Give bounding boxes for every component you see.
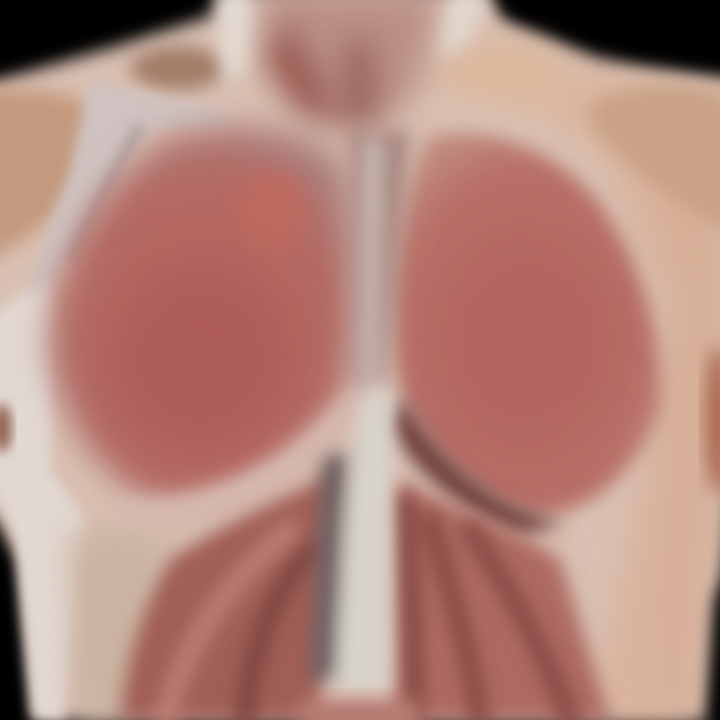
diaphragm membrane: left — [110, 375, 360, 526]
lung shading — [110, 250, 615, 450]
clavicle hollow: left — [130, 46, 226, 90]
shoulder: left — [0, 89, 112, 265]
lower left flank — [70, 530, 170, 720]
neck and throat — [262, 0, 440, 130]
lung: left — [48, 126, 355, 505]
bottom edge tint — [300, 700, 420, 720]
membranes: pale tissue on left side — [0, 80, 240, 720]
central mediastinum — [350, 130, 410, 390]
left edge dark spot — [0, 404, 11, 452]
neck side tissue — [215, 0, 490, 85]
central white band — [310, 385, 392, 690]
skin: right chest and flank — [430, 60, 720, 720]
lung: right — [393, 133, 661, 515]
shoulder: right — [590, 85, 720, 235]
clavicle hollow: right — [435, 40, 565, 100]
abdominal organs — [120, 475, 610, 720]
right edge reddish patch — [706, 345, 720, 495]
lung lower shadow: right — [390, 395, 565, 535]
patch on left lung — [238, 172, 306, 252]
abdominal folds — [165, 500, 570, 720]
